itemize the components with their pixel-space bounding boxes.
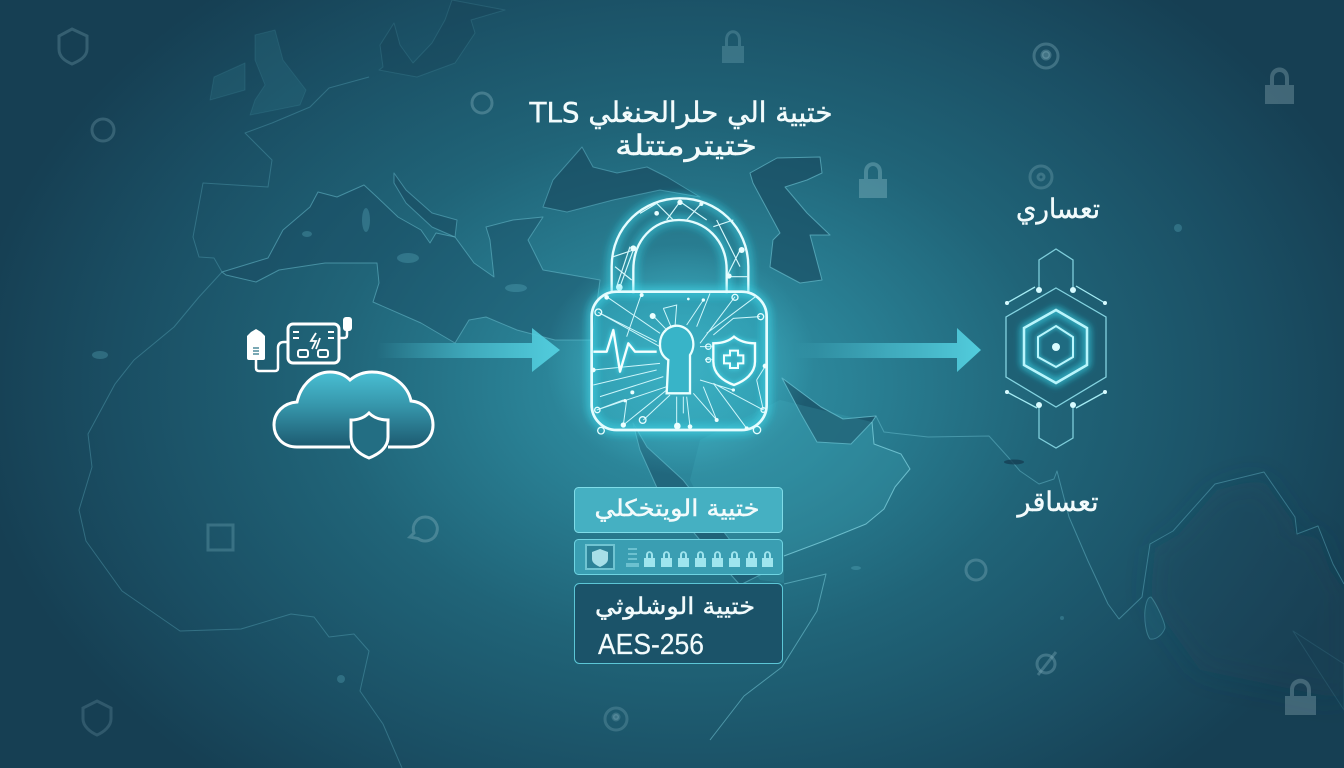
hexagon: outer frame <box>1006 288 1106 407</box>
background icon: shield bottom left <box>83 701 111 735</box>
map: Great Britain and Ireland <box>210 30 306 115</box>
padlock: body outline <box>592 292 767 430</box>
background icon: speech circle <box>410 517 437 541</box>
map: Black Sea <box>543 147 700 212</box>
hexagon: bottom connector <box>1039 406 1073 448</box>
panel: top cipher label: ختيية الويتخكلي <box>594 496 760 522</box>
label: top right: تعساري <box>1016 194 1100 225</box>
hexagon: top connector <box>1039 249 1073 288</box>
background icon: lock near title <box>859 162 887 198</box>
map: Oman coast <box>784 422 910 556</box>
icons: row of locks <box>644 551 773 567</box>
arrow: lock to output <box>795 328 981 372</box>
background icon: slashed circle <box>1037 652 1056 675</box>
map: West African coast <box>79 272 402 768</box>
panel: encryption algorithm: AES-256 <box>598 629 704 661</box>
padlock: heartbeat line <box>593 330 657 372</box>
padlock: body fill <box>592 292 767 430</box>
background icon: ring left <box>92 119 114 141</box>
background icon: round badge bottom <box>605 708 627 730</box>
background icon: circle glyph top right <box>1034 44 1058 68</box>
output node: hexagon <box>1005 249 1107 448</box>
arrow: input to lock <box>377 328 560 372</box>
map: Red Sea <box>633 423 770 585</box>
icon: plug <box>343 317 352 331</box>
map: Southeast Asia fragment <box>1293 631 1344 710</box>
lock glow <box>545 245 815 475</box>
padlock: circuit traces <box>591 293 767 430</box>
hexagon: inner ring <box>1038 326 1073 367</box>
label: bottom right: تعساقر <box>1015 487 1098 518</box>
background icon: lock top center <box>722 30 744 63</box>
padlock: keyhole <box>660 326 693 393</box>
background icon: lock top right <box>1265 68 1294 104</box>
padlock: corner nodes <box>598 426 761 434</box>
padlock: shackle <box>612 198 748 293</box>
icon: cloud shield <box>351 413 388 458</box>
background icon: ring top <box>472 93 492 113</box>
hexagon: circuit branches <box>1005 286 1107 408</box>
background icon: lock bottom right <box>1285 679 1316 715</box>
map: Bay of Bengal <box>1150 478 1344 700</box>
padlock: shackle circuit <box>613 200 748 291</box>
title <box>529 96 832 162</box>
map: small islands <box>92 208 1182 683</box>
map: Baltic Sea <box>379 0 505 77</box>
icon: IV bag <box>247 329 265 360</box>
hexagon: bright ring <box>1024 310 1087 383</box>
map: Sri Lanka <box>1145 597 1165 639</box>
map: Persian Gulf <box>782 378 876 444</box>
background icon: target near label <box>1030 166 1052 188</box>
map: Caspian Sea <box>750 157 830 283</box>
padlock <box>591 198 767 434</box>
map: Iran and India coast <box>876 416 1344 619</box>
icon: shield stamp <box>586 545 614 569</box>
hexagon: center dot <box>1052 343 1060 351</box>
hexagon: ring fill <box>1024 310 1087 383</box>
map: Arabian Peninsula land <box>690 400 910 583</box>
panel: encryption algorithm <box>574 584 782 664</box>
padlock: medical shield <box>713 337 755 385</box>
icon: cloud <box>274 372 433 447</box>
icon: small stack <box>626 548 639 567</box>
panel: lock row <box>574 540 782 574</box>
icon: tubing <box>256 330 347 371</box>
map: Horn of Africa <box>710 574 826 740</box>
map: Adriatic Sea <box>394 173 457 237</box>
background icon: ring right <box>966 560 986 580</box>
map: Mediterranean Sea <box>222 185 600 343</box>
panel: top cipher label <box>574 488 782 532</box>
background icon: square <box>208 525 233 550</box>
icon: medical device and cloud <box>247 317 433 458</box>
panel: encryption algorithm: ختيية الوشلوثي <box>595 594 755 620</box>
title: ختيترمتتلة <box>615 129 757 162</box>
map: Gulf of Kutch <box>1004 460 1024 464</box>
title: ختيية الي حلرالحنغلي TLS <box>529 96 832 129</box>
icon: monitor device <box>288 324 339 363</box>
background icon: shield top left <box>59 29 87 64</box>
map: European Atlantic coast <box>193 77 369 272</box>
